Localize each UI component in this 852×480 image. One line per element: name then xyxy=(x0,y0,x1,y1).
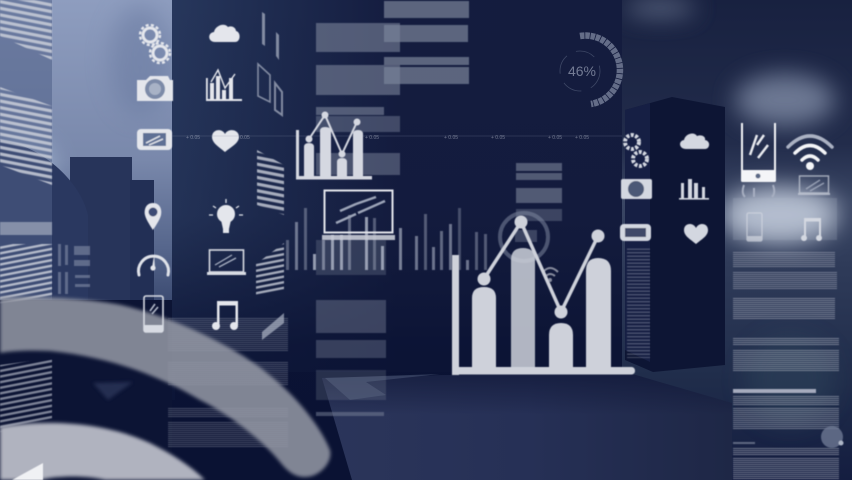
icon: cloud xyxy=(209,25,240,42)
icon: console right xyxy=(620,224,651,241)
icon: smartphone xyxy=(144,296,163,332)
laptop outline xyxy=(322,190,395,240)
icon: music note right xyxy=(801,218,822,241)
large wifi arc: middle xyxy=(0,297,330,477)
dashed data line: 0.05 xyxy=(240,135,250,141)
ring gauge 46%: 46% xyxy=(568,63,596,79)
icon: large smartphone xyxy=(741,123,776,197)
icon: camera xyxy=(137,76,173,101)
main bar and line chart xyxy=(452,216,635,375)
dashed data line: + 0.05 xyxy=(365,135,379,141)
text column: perspective stripes xyxy=(256,150,284,340)
floor / rooftop xyxy=(322,371,732,480)
icon: game console xyxy=(137,129,172,150)
faint triangle xyxy=(93,382,133,400)
icon: music note xyxy=(212,301,238,330)
icon: small bar chart xyxy=(206,70,242,101)
icon column left xyxy=(137,25,173,332)
icon: laptop right xyxy=(798,176,830,195)
lens flare dot xyxy=(821,426,844,448)
icon: map pin xyxy=(145,203,161,230)
icon: heart xyxy=(212,130,239,152)
icon column center-left xyxy=(206,25,246,330)
left tower small panels xyxy=(58,244,90,294)
dashed data line: + 0.05 xyxy=(575,135,589,141)
text block lower left xyxy=(168,318,288,447)
icon: heart right xyxy=(684,224,708,244)
ring gauge 46% xyxy=(560,36,620,104)
icon: gears xyxy=(140,25,170,63)
icon: camera right xyxy=(621,179,652,199)
icon: bars right xyxy=(679,179,709,200)
left tower text stripes xyxy=(0,0,52,432)
icon: phone right faint xyxy=(747,213,762,241)
small line and bar chart xyxy=(296,112,372,180)
central grey text bars xyxy=(316,1,562,416)
equalizer bar chart xyxy=(286,208,487,270)
icon: gears right xyxy=(625,135,647,166)
perspective mini panels xyxy=(258,12,282,115)
icon: light bulb xyxy=(209,199,243,233)
dashed data line: + 0.05 xyxy=(444,135,458,141)
dashed data line xyxy=(172,135,622,141)
white corner of phone icon xyxy=(12,463,43,480)
faint wifi and dial behind chart xyxy=(500,213,558,282)
dashed data line: + 0.05 xyxy=(548,135,562,141)
dashed data line: + 0.05 xyxy=(491,135,505,141)
icon: gauge xyxy=(138,255,168,275)
icon: cloud right xyxy=(680,133,709,149)
large wifi arc: inner xyxy=(0,423,205,480)
right tower side stripes xyxy=(627,248,650,358)
dashed data line: + 0.05 xyxy=(186,135,200,141)
right tower icons xyxy=(620,133,709,244)
icon: wifi xyxy=(788,136,832,170)
icon: laptop xyxy=(207,250,246,275)
right text panels xyxy=(733,198,839,480)
